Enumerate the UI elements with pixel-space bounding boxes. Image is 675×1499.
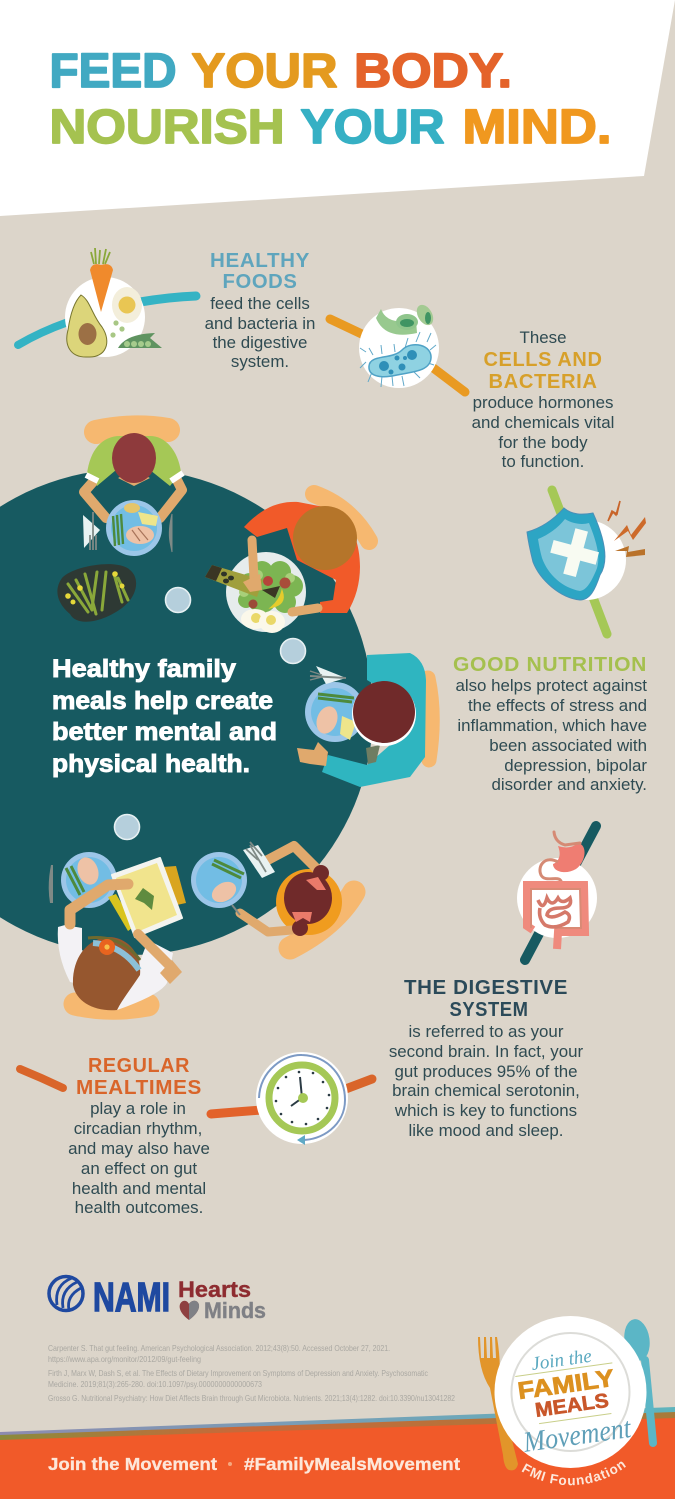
text: digestive system: like mood and sleep. [409, 1121, 563, 1140]
text: regular mealtimes: and may also have [68, 1139, 210, 1158]
text: regular mealtimes: an effect on gut [81, 1159, 197, 1178]
text: cells and bacteria: CELLS AND [484, 349, 602, 371]
plate rim [512, 1333, 630, 1451]
logo: Hearts + Minds [178, 1277, 266, 1323]
text: digestive system: is referred to as your [409, 1022, 564, 1041]
text: cells and bacteria [472, 328, 614, 471]
text: healthy foods: FOODS [222, 271, 298, 293]
text: cells and bacteria: These [520, 328, 566, 347]
text: healthy foods: feed the cells [210, 294, 310, 313]
text: regular mealtimes: play a role in [90, 1099, 186, 1118]
text: good nutrition: also helps protect against [455, 676, 647, 695]
text: regular mealtimes: MEALTIMES [76, 1077, 202, 1099]
icon: clock [211, 1052, 372, 1145]
icon: digestive system [517, 826, 597, 960]
text: digestive system: SYSTEM [450, 999, 528, 1021]
title: YOUR [300, 101, 444, 154]
logo: Hearts + Minds: Hearts [178, 1277, 251, 1302]
footer text: #FamilyMealsMovement [244, 1454, 460, 1474]
references [48, 1343, 455, 1403]
icon: healthy foods [18, 248, 196, 357]
text: regular mealtimes: health and mental [72, 1179, 206, 1198]
text: cells and bacteria: produce hormones [473, 393, 613, 412]
text: digestive system: gut produces 95% of the [394, 1062, 578, 1081]
title: FEED [50, 45, 176, 98]
title: MIND. [462, 101, 612, 154]
text: regular mealtimes: circadian rhythm, [74, 1119, 202, 1138]
person: orange shirt with salad [205, 494, 369, 633]
badge wording [511, 1342, 634, 1459]
white title banner [0, 0, 675, 216]
text: good nutrition: been associated with [489, 736, 647, 755]
badge: Family Meals Movement [478, 1316, 657, 1486]
text: digestive system: brain chemical serotonin, [392, 1081, 580, 1100]
logo: NAMI: NAMI [93, 1274, 170, 1320]
icon: cells and bacteria [330, 302, 465, 392]
main message: Healthy family [52, 655, 236, 683]
footer stripes [0, 1407, 675, 1442]
footer band [0, 1418, 675, 1499]
person: teal shirt at right [297, 653, 432, 787]
person: woman with casserole [49, 852, 186, 1010]
accent line: mealtimes [20, 1069, 63, 1088]
plate [494, 1316, 646, 1468]
footer text: Join the Movement [48, 1454, 217, 1474]
text: healthy foods [205, 250, 315, 371]
text: regular mealtimes: REGULAR [88, 1055, 190, 1077]
text: good nutrition [453, 654, 647, 794]
text: cells and bacteria: to function. [502, 452, 584, 471]
text: digestive system: THE DIGESTIVE [404, 977, 568, 999]
text: good nutrition: GOOD NUTRITION [453, 654, 647, 676]
serving dish with asparagus [57, 564, 136, 622]
references: Medicine. 2019;81(3):265-280. doi:10.1097/psy.0000000000000673 [48, 1379, 262, 1389]
references: Firth J, Marx W, Dash S, et al. The Effects of Dietary Improvement on Symptoms of Depression and Anxiety. Psychosomatic [48, 1368, 428, 1378]
footer text [48, 1454, 460, 1474]
FMI Foundation: FMI Foundation [522, 1462, 626, 1486]
text: digestive system: second brain. In fact, your [389, 1042, 584, 1061]
text: healthy foods: HEALTHY [210, 250, 310, 272]
text: digestive system: which is key to functions [394, 1101, 577, 1120]
title [50, 45, 612, 154]
text: regular mealtimes: health outcomes. [75, 1198, 203, 1217]
text: healthy foods: and bacteria in [205, 314, 315, 333]
badge wording: FAMILY [516, 1365, 616, 1405]
text: good nutrition: inflammation, which have [457, 716, 647, 735]
references: Carpenter S. That gut feeling. American Psychological Association. 2012;43(8):50. Accessed October 27, 2021. [48, 1343, 390, 1353]
place setting: top diner [83, 500, 172, 556]
water glasses [114, 588, 306, 840]
badge wording: Join the [530, 1346, 593, 1375]
person: girl with bows [191, 842, 354, 948]
main message [52, 655, 277, 778]
text: cells and bacteria: for the body [498, 433, 588, 452]
text: digestive system [389, 977, 584, 1140]
text: cells and bacteria: and chemicals vital [472, 413, 614, 432]
icon: fork [478, 1337, 518, 1470]
logo: NAMI [49, 1274, 170, 1320]
text: healthy foods: system. [231, 352, 289, 371]
text: good nutrition: depression, bipolar [504, 756, 647, 775]
text: cells and bacteria: BACTERIA [488, 371, 598, 393]
table [0, 469, 373, 955]
main message: physical health. [52, 750, 250, 778]
references: Grosso G. Nutritional Psychiatry: How Diet Affects Brain through Gut Microbiota. Nutrients. 2021;13(4):1282. doi:10.3390/nu13041282 [48, 1393, 455, 1403]
icon: shield [527, 490, 646, 634]
icon: spoon [622, 1317, 653, 1443]
text: regular mealtimes [68, 1055, 210, 1217]
text: good nutrition: disorder and anxiety. [491, 775, 647, 794]
badge wording: MEALS [534, 1390, 610, 1422]
logo: Hearts + Minds: Minds [204, 1298, 266, 1323]
text: healthy foods: the digestive [213, 333, 307, 352]
title: NOURISH [50, 101, 284, 154]
references: https://www.apa.org/monitor/2012/09/gut-feeling [48, 1354, 201, 1364]
badge wording: Movement [521, 1412, 634, 1459]
title: YOUR [192, 45, 338, 98]
title: BODY. [354, 45, 512, 98]
text: good nutrition: the effects of stress and [468, 696, 647, 715]
main message: meals help create [52, 687, 273, 715]
main message: better mental and [52, 718, 277, 746]
person: top diner in green [84, 427, 183, 518]
